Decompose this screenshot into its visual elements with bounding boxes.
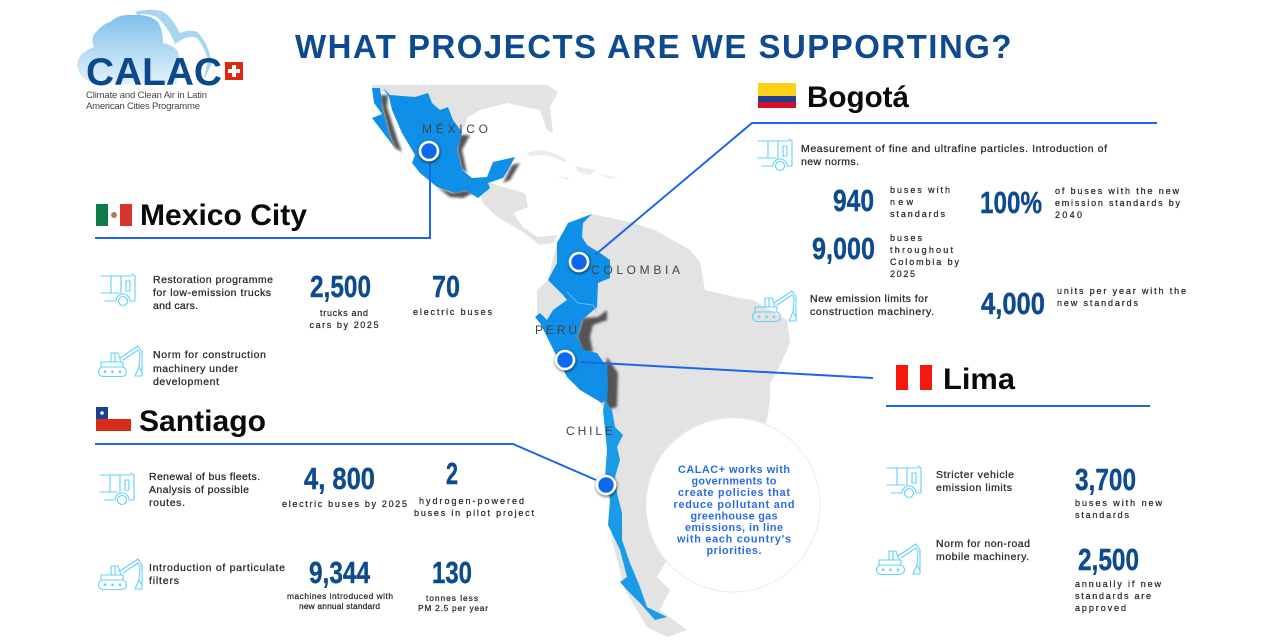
logo wordmark: CALAC [86,51,222,94]
map pin: Mexico City [420,142,438,160]
panel: Bogotá [752,81,1186,322]
text: measurement: Measurement of fine and ultrafine particles. Introduction of [801,143,1107,155]
caption: buses with new standards: new [890,197,914,207]
icon: excavator [98,346,142,376]
divider line: Lima [886,405,1150,407]
caption: of buses with new standards: of buses with the new [1055,186,1180,196]
text: particulate filters: filters [149,575,179,587]
connector: Lima [581,362,873,378]
stat: 9,344: 9,344 [309,555,371,590]
stat: 130: 130 [432,555,472,590]
text: stricter limits: Stricter vehicle [936,469,1014,481]
caption: annually if approved: approved [1075,603,1126,613]
text: restoration programme: and cars. [153,300,198,312]
stat: 70: 70 [432,269,460,304]
stat: 4,800: 4, 800 [304,461,375,496]
callout: CALAC+ mission: governments to [692,476,777,488]
stat: 2,500: 2,500 [310,269,371,304]
caption: buses with new standards: standards [1075,510,1130,520]
icon: cloud [77,10,212,84]
text: new emission limits: construction machinery. [810,306,934,318]
text: renewal of bus fleets: Renewal of bus fleets. [149,471,260,483]
caption: buses throughout Colombia: Colombia by [890,257,960,267]
caption: units per year: units per year with the [1057,286,1186,296]
Caribbean islands [527,150,618,180]
map pin: Bogotá [570,253,588,271]
callout: CALAC+ mission: greenhouse gas [690,510,778,522]
caption: annually if approved: standards are [1075,591,1151,601]
logo subtitle: American Cities Programme [86,101,200,112]
flag: Peru [896,365,932,390]
caption: buses throughout Colombia: 2025 [890,269,915,279]
heading: Lima: Lima [943,363,1015,396]
caption: buses throughout Colombia: throughout [890,245,953,255]
icon: Swiss cross [225,62,243,80]
icon: truck [101,274,135,306]
stat: 2,500: 2,500 [1078,542,1139,577]
label: Peru: PERÚ [535,322,577,337]
panel: Lima [876,363,1162,613]
text: stricter limits: emission limits [936,482,1012,494]
stat: 3,700: 3,700 [1075,462,1136,497]
logo subtitle: Climate and Clean Air in Latin [86,90,207,101]
caption: trucks and cars: trucks and [320,308,368,318]
text: new emission limits: New emission limits for [810,293,928,305]
South America landmass [537,214,790,637]
caption: of buses with new standards: emission standards by [1055,198,1180,208]
label: Mexico: MÉXICO [422,121,488,136]
caption: electric buses by 2025: electric buses by 2025 [282,499,407,509]
connector: Bogotá [595,123,1157,255]
heading: Santiago: Santiago [139,405,266,438]
North America landmass [372,85,558,133]
text: norm for construction: machinery under [153,363,238,375]
caption: tonnes less: PM 2.5 per year [418,603,488,613]
text: measurement: new norms. [801,156,859,168]
text: norm for non-road: mobile machinery. [936,551,1029,563]
icon: truck [758,139,792,170]
flag: Chile [96,407,131,431]
caption: of buses with new standards: 2040 [1055,210,1082,220]
icon: excavator [876,544,920,574]
text: renewal of bus fleets: Analysis of possible [149,484,249,496]
panel: Santiago [96,405,534,613]
connector: Santiago [95,444,596,480]
caption: machines introduced: new annual standard [299,601,380,611]
label: Colombia: COLOMBIA [591,263,680,277]
map pin: Lima [556,351,574,369]
callout: CALAC+ mission: create policies that [678,487,790,499]
Mexico highlighted [372,88,515,198]
stat: 9,000: 9,000 [812,231,875,266]
caption: buses throughout Colombia: buses [890,233,922,243]
Chile highlighted [603,400,667,620]
callout: CALAC+ mission: CALAC+ works with [678,464,790,476]
caption: units per year: new standards [1057,298,1138,308]
connector: Mexico City [95,151,430,238]
caption: machines introduced: machines introduced with [287,591,393,601]
panel: Mexico City [96,199,492,388]
text: norm for construction: Norm for construction [153,349,266,361]
text: norm for non-road: Norm for non-road [936,538,1030,550]
heading: Bogotá: Bogotá [807,81,909,114]
icon: excavator [752,291,796,322]
logo: CALAC+ [77,10,243,112]
icon: excavator [98,559,142,590]
caption: hydrogen-powered buses: hydrogen-powered [419,496,524,506]
text: restoration programme: Restoration programme [153,274,273,286]
text: norm for construction: development [153,376,219,388]
label: Chile: CHILE [566,424,613,438]
caption: buses with new standards: buses with new [1075,498,1162,508]
callout: CALAC+ mission: with each country's [676,534,791,546]
stat: 2: 2 [446,456,458,491]
heading: Mexico City: Mexico City [140,199,307,232]
map shadows [380,95,618,410]
caption: hydrogen-powered buses: buses in pilot project [414,508,534,518]
stat: 4,000: 4,000 [981,286,1045,321]
map of Latin America [372,85,790,637]
icon: truck [100,473,134,504]
Central America landmass [480,182,557,245]
caption: annually if approved: annually if new [1075,579,1162,589]
callout: CALAC+ mission: reduce pollutant and [674,499,794,511]
text: renewal of bus fleets: routes. [149,497,185,509]
text: restoration programme: for low-emission trucks [153,287,271,299]
stat: 100%: 100% [980,185,1042,220]
caption: buses with new standards: buses with [890,185,950,195]
text: particulate filters: Introduction of particulate [149,562,285,574]
callout: CALAC+ mission [646,418,820,592]
caption: trucks and cars: cars by 2025 [310,320,378,330]
caption: electric buses: electric buses [413,307,492,317]
stat: 940: 940 [833,183,874,218]
caption: buses with new standards: standards [890,209,946,219]
flag: Mexico [96,204,132,226]
Colombia and Peru highlighted [535,214,610,403]
callout: CALAC+ mission: emissions, in line [685,522,783,534]
caption: tonnes less: tonnes less [426,593,478,603]
flag: Colombia [758,83,796,108]
title: WHAT PROJECTS ARE WE SUPPORTING? [295,28,1013,65]
icon: truck [887,466,921,498]
map pin: Santiago [597,476,615,494]
callout: CALAC+ mission: priorities. [706,545,762,557]
